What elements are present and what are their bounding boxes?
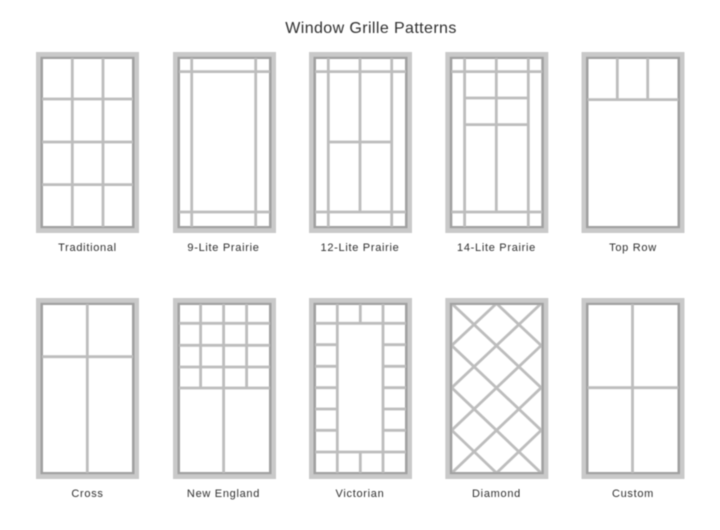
panel: Top Row [582, 52, 684, 254]
label: Diamond: Diamond [472, 488, 521, 500]
panel: 12-Lite Prairie [309, 52, 412, 254]
label: Cross: Cross [71, 488, 104, 500]
window: Victorian [309, 298, 412, 479]
panel: Cross [36, 298, 139, 500]
label: Victorian: Victorian [336, 488, 384, 500]
label: Top Row: Top Row [609, 242, 657, 254]
panel: Custom [582, 298, 684, 500]
label: Traditional: Traditional [58, 242, 117, 254]
window: 14-Lite Prairie [445, 52, 548, 233]
label: 9-Lite Prairie: 9-Lite Prairie [187, 242, 260, 254]
window: 12-Lite Prairie [309, 52, 412, 233]
window: Custom [582, 298, 684, 479]
window: New England [173, 298, 276, 479]
title: Window Grille Patterns [285, 20, 457, 37]
label: 12-Lite Prairie: 12-Lite Prairie [321, 242, 399, 254]
label: Custom: Custom [612, 488, 654, 500]
window: 9-Lite Prairie [173, 52, 276, 233]
panel: New England [173, 298, 276, 500]
window: Traditional [36, 52, 139, 233]
panel: Diamond [445, 298, 548, 500]
panel: 9-Lite Prairie [173, 52, 276, 254]
panel: Traditional [36, 52, 139, 254]
window: Diamond [445, 298, 548, 479]
window: Top Row [582, 52, 684, 233]
window: Cross [36, 298, 139, 479]
panel: Victorian [309, 298, 412, 500]
panel: 14-Lite Prairie [445, 52, 548, 254]
label: 14-Lite Prairie: 14-Lite Prairie [457, 242, 536, 254]
label: New England: New England [187, 488, 260, 500]
